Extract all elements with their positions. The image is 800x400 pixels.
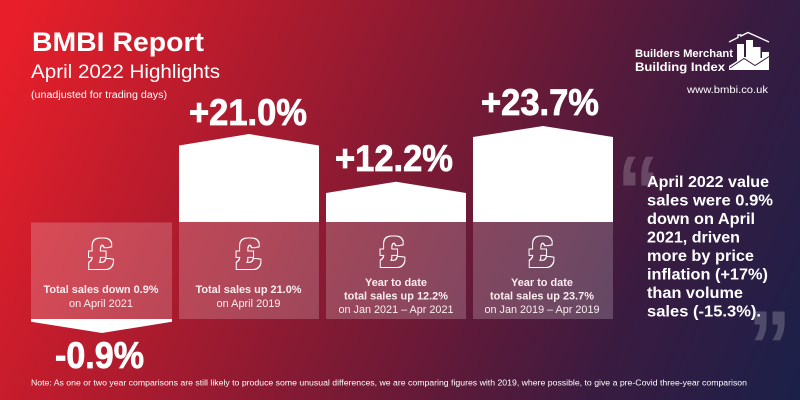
panel caption: on April 2019 xyxy=(216,298,281,310)
panel caption: on Jan 2019 – Apr 2019 xyxy=(484,304,600,316)
quote text: April 2022 value xyxy=(647,174,769,191)
arrow: down xyxy=(31,319,172,333)
quote text xyxy=(647,174,773,320)
panel: year to date up 23.7% xyxy=(473,82,613,319)
logo wordmark xyxy=(635,48,733,74)
panel background xyxy=(473,222,613,319)
value: +12.2% xyxy=(335,138,453,179)
heading: BMBI Report xyxy=(32,27,204,57)
value: +21.0% xyxy=(189,92,307,133)
quote text: sales were 0.9% xyxy=(647,192,773,210)
website: www.bmbi.co.uk xyxy=(686,85,769,96)
panel caption xyxy=(338,277,454,316)
subheading: April 2022 Highlights xyxy=(31,61,220,83)
icon: pound sign: £ xyxy=(90,231,113,277)
bar xyxy=(179,134,319,222)
logo: Builders Merchant Building Index xyxy=(635,32,769,96)
footnote: Note: As one or two year comparisons are still likely to produce some unusual differences, we are comparing figures with 2019, where possible, to give a pre-Covid three-year comparison xyxy=(31,378,747,388)
title block xyxy=(31,27,220,101)
bar xyxy=(473,126,613,222)
panel caption: on April 2021 xyxy=(69,298,133,310)
quote callout xyxy=(617,135,791,400)
panel caption: Total sales down 0.9% xyxy=(44,284,159,296)
quote text: down on April xyxy=(647,211,755,228)
panel caption xyxy=(44,284,159,310)
panel caption xyxy=(196,284,302,310)
panel caption: Total sales up 21.0% xyxy=(196,284,302,296)
panel caption xyxy=(484,277,600,316)
panel background xyxy=(179,222,319,319)
panel: total sales down 0.9% xyxy=(31,222,172,376)
quote text: 2021, driven xyxy=(647,230,740,246)
panel background xyxy=(326,222,466,319)
quote text: inflation (+17%) xyxy=(647,266,768,284)
logo wordmark: Building Index xyxy=(635,60,725,74)
icon: pound sign: £ xyxy=(530,229,553,275)
bar xyxy=(326,182,466,222)
qualifier: (unadjusted for trading days) xyxy=(31,90,167,101)
panel caption: total sales up 12.2% xyxy=(344,290,449,302)
quote text: than volume xyxy=(647,285,743,302)
panel: year to date up 12.2% xyxy=(326,138,466,319)
panel caption: Year to date xyxy=(511,277,573,289)
icon: pound sign: £ xyxy=(237,231,260,277)
panel caption: Year to date xyxy=(365,277,427,289)
logo wordmark: Builders Merchant xyxy=(635,48,733,60)
opening quote mark: “ xyxy=(617,135,660,249)
panel caption: on Jan 2021 – Apr 2021 xyxy=(338,304,454,316)
panel background xyxy=(31,222,172,319)
quote text: more by price xyxy=(647,248,754,265)
panel caption: total sales up 23.7% xyxy=(490,290,595,302)
logo icon: house and skyline xyxy=(729,32,769,70)
panel: total sales up 21.0% xyxy=(179,92,319,319)
value: +23.7% xyxy=(481,82,599,123)
quote text: sales (-15.3%). xyxy=(647,304,761,320)
icon: pound sign: £ xyxy=(381,229,404,275)
value: -0.9% xyxy=(55,335,144,376)
